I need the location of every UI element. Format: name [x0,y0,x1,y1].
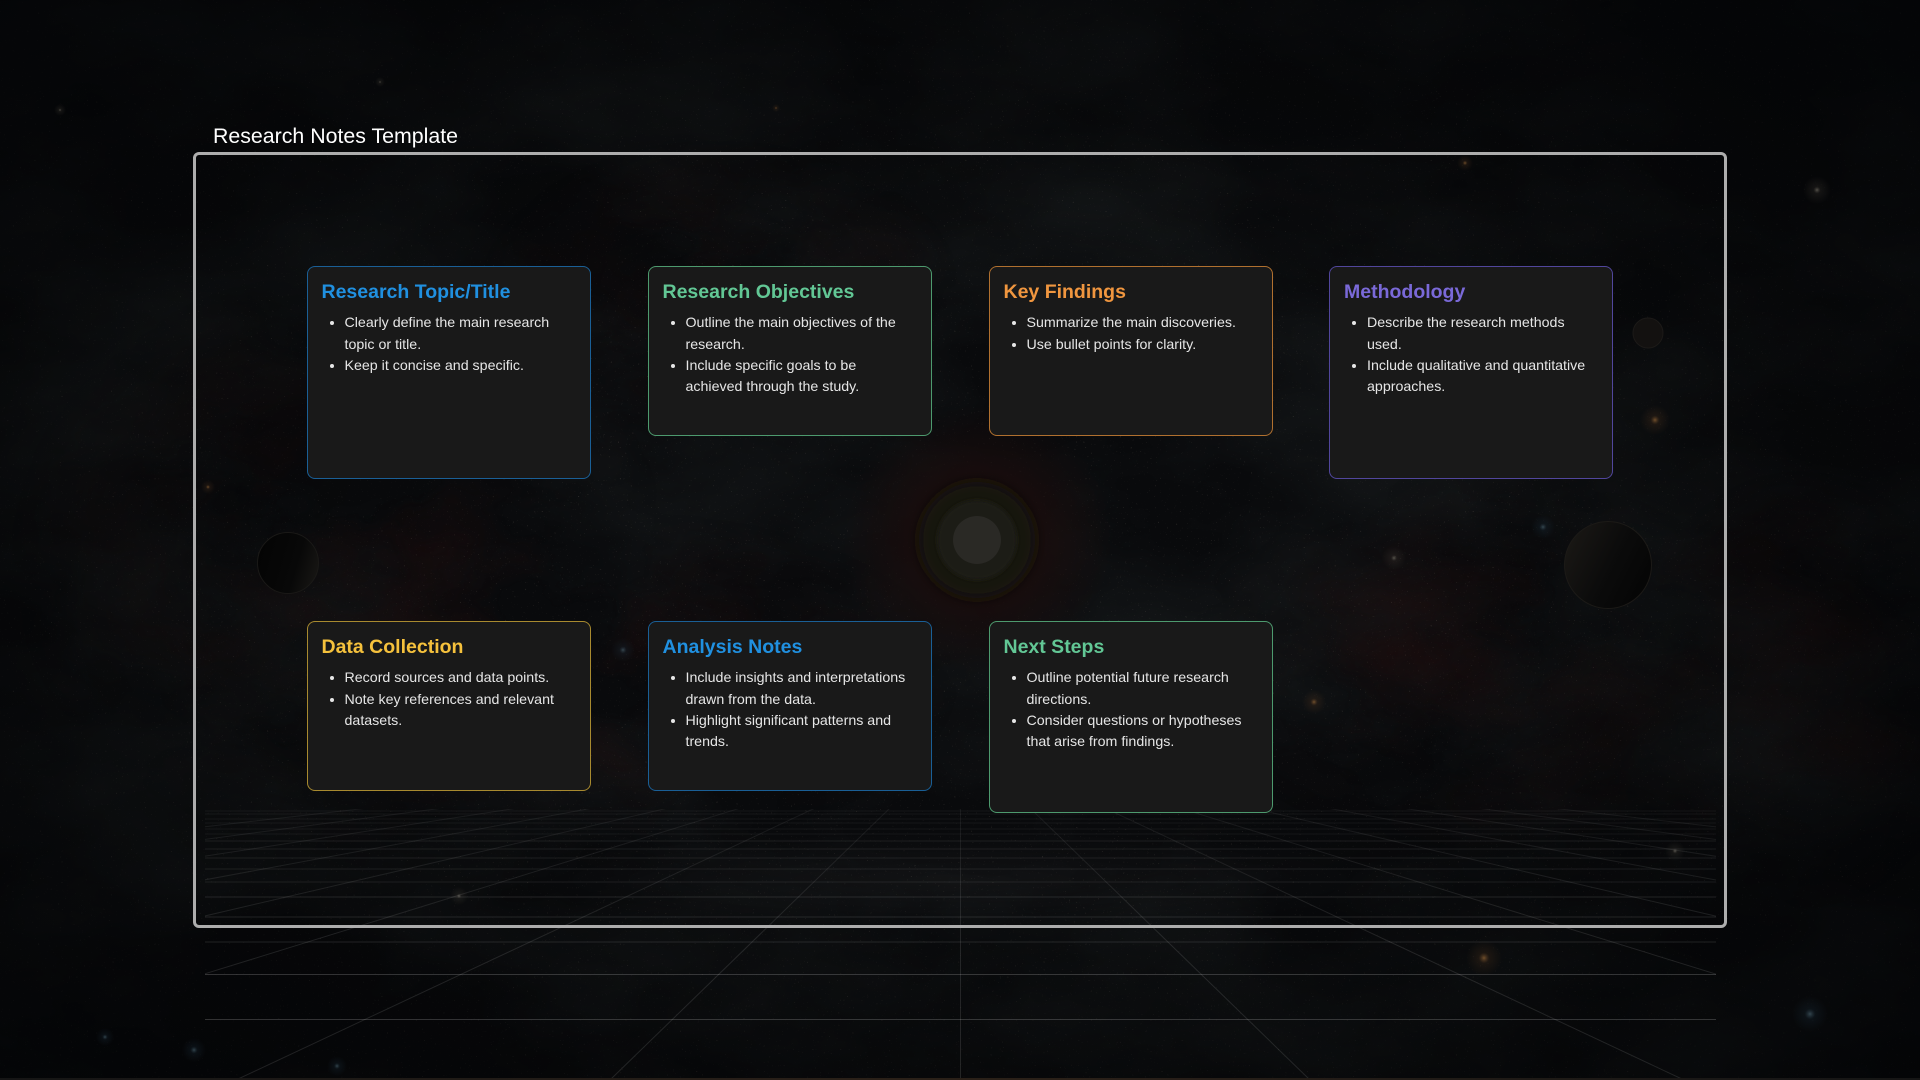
list: methodology points: Describe the research methods used. [1367,315,1565,353]
heading: next steps: Next Steps [1004,636,1104,658]
list: data points [330,670,554,729]
heading: data collection: Data Collection [322,636,463,658]
heading: key findings: Key Findings [1004,280,1126,302]
list: findings points [1012,315,1236,353]
list: analysis points: Highlight significant patterns and trends. [686,713,891,750]
list: next steps points: Consider questions or hypotheses that arise from findings. [1026,713,1242,750]
list: objectives points: Outline the main objectives of the research. [686,315,896,353]
planets [258,318,1663,608]
panel: key findings [988,266,1272,436]
list: research topic points: Keep it concise and specific. [344,358,524,374]
title: Research Notes Template [213,124,458,148]
panel: methodology [1329,266,1613,478]
heading: research objectives: Research Objectives [662,280,854,302]
panel: data collection [306,620,590,791]
list: objectives points [671,315,896,395]
list: analysis points [671,670,905,750]
panel: research topic/title [306,266,590,478]
list: research topic points [330,315,549,374]
list: methodology points [1352,315,1585,395]
list: analysis points: Include insights and interpretations drawn from the data. [686,670,905,708]
list: next steps points [1012,670,1242,750]
heading: research topic/title: Research Topic/Title [322,280,510,302]
list: objectives points: Include specific goals to be achieved through the study. [686,358,859,395]
panel: next steps [988,620,1272,812]
floor grid [205,809,1716,1078]
list: research topic points: Clearly define the main research topic or title. [344,315,549,353]
list: data points: Note key references and relevant datasets. [344,692,554,729]
list: methodology points: Include qualitative and quantitative approaches. [1367,358,1585,395]
list: next steps points: Outline potential future research directions. [1026,670,1229,708]
bottom horizon strip [0,1078,1920,1080]
list: findings points: Use bullet points for clarity. [1026,337,1196,353]
list: findings points: Summarize the main discoveries. [1026,315,1236,331]
panel: research objectives [648,266,932,436]
panel: analysis notes [648,620,932,791]
heading: methodology: Methodology [1344,280,1465,302]
main frame [193,152,1727,928]
list: data points: Record sources and data points. [344,670,549,686]
central vortex [842,405,1112,675]
heading: analysis notes: Analysis Notes [662,636,802,658]
